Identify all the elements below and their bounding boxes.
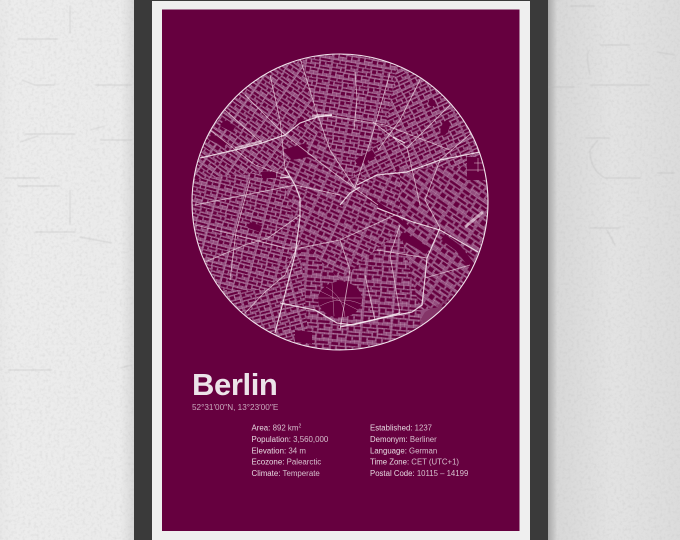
facts column right: Postal Code: 10115 – 14199 [370, 469, 468, 478]
facts column left: Population: 3,560,000 [252, 435, 329, 444]
facts column left: Ecozone: Palearctic [252, 458, 321, 467]
facts column right: Established: 1237 [370, 424, 432, 432]
Tempelhof field [318, 282, 362, 318]
city blocks [190, 50, 490, 355]
secondary roads [195, 58, 475, 330]
title: Berlin [192, 367, 277, 402]
facts column left: Area: 892 km [252, 424, 298, 432]
primary roads [200, 115, 483, 333]
facts column right [370, 424, 468, 478]
wall left [0, 0, 134, 540]
street texture districts [190, 50, 490, 355]
facts column right: Demonym: Berliner [370, 435, 437, 444]
facts column left: Climate: Temperate [252, 469, 320, 478]
wall right [548, 0, 680, 540]
picture frame [134, 0, 548, 540]
facts column left: 2 [298, 424, 301, 430]
facts column right: Time Zone: CET (UTC+1) [370, 458, 459, 467]
map base tone [192, 54, 488, 350]
circular street map of Berlin [190, 50, 490, 355]
facts column left [252, 424, 329, 478]
lakes, river and open land [371, 100, 485, 328]
coordinates: 52°31′00′′N, 13°23′00′′E [192, 403, 279, 412]
facts column left: Elevation: 34 m [252, 446, 306, 455]
map circle outline [192, 54, 488, 350]
poster background [162, 10, 520, 531]
facts column right: Language: German [370, 446, 437, 455]
